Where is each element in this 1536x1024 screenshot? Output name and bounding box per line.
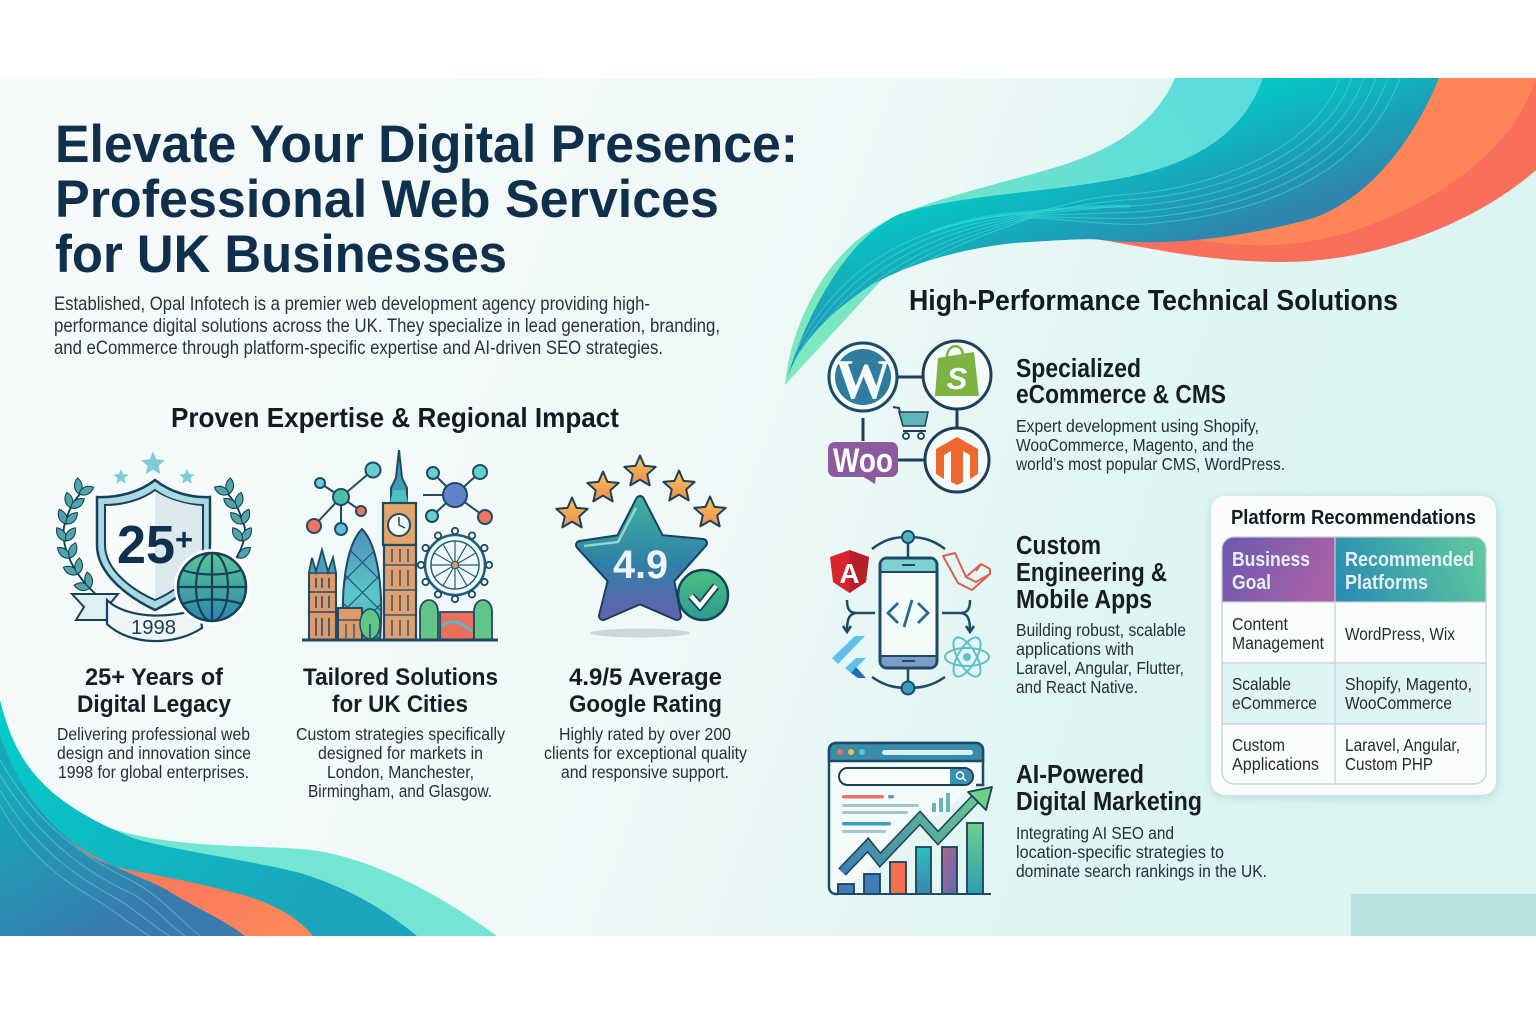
panel: platform recommendations: Laravel, Angular, [1345,735,1460,755]
block: AI marketing: AI-Powered [1016,761,1144,789]
icon: mobile apps [830,531,990,694]
block: custom engineering: Custom [1016,532,1101,560]
stat: google rating [544,664,747,782]
title: Professional Web Services [55,170,719,229]
icon: 25+ years shield [54,452,254,641]
icon: 25+ years shield: 1998 [131,617,176,639]
wave: top right [785,78,1536,385]
heading: technical solutions: High-Performance Technical Solutions [909,285,1398,317]
stat: google rating: 4.9/5 Average [569,664,722,691]
panel: platform recommendations: Shopify, Magento, [1345,674,1472,694]
block: custom engineering: Mobile Apps [1016,586,1152,614]
icon: UK cities skyline [302,450,498,655]
title: Elevate Your Digital Presence: [55,115,798,174]
stat: 25+ years: 25+ Years of [85,664,224,691]
block: ecommerce and CMS: Expert development using Shopify, [1016,416,1259,436]
icon: ecommerce platforms [828,341,991,492]
stat: tailored solutions: Birmingham, and Glasgow. [308,781,492,801]
stat: 25+ years: Digital Legacy [77,691,231,718]
title: for UK Businesses [55,225,507,284]
block: ecommerce and CMS: Specialized [1016,355,1141,383]
block: custom engineering [1016,532,1186,697]
block: custom engineering: Building robust, scalable [1016,620,1186,640]
intro paragraph: performance digital solutions across the UK. They specialize in lead generation, branding, [54,315,720,337]
stat: google rating: Google Rating [569,691,722,718]
stat: google rating: clients for exceptional quality [544,743,747,763]
block: custom engineering: and React Native. [1016,677,1138,697]
block: ecommerce and CMS: world’s most popular CMS, WordPress. [1015,454,1285,474]
icon: mobile apps: A [839,558,860,589]
stat: google rating: Highly rated by over 200 [559,724,731,744]
icon: ecommerce platforms: W [835,349,891,411]
panel: platform recommendations: Applications [1232,754,1319,774]
panel: platform recommendations: Platforms [1345,572,1428,594]
stat: tailored solutions: designed for markets in [318,743,483,763]
panel: platform recommendations: Platform Recommendations [1231,507,1476,529]
icon: 25+ years shield: 25 [117,515,175,575]
icon: rating stars: 4.9 [613,543,668,587]
panel: platform recommendations: Custom [1232,735,1285,755]
panel: platform recommendations: Management [1232,633,1324,653]
block: AI marketing: location-specific strategies to [1016,842,1224,862]
panel: platform recommendations: Goal [1232,572,1271,594]
block: custom engineering: Laravel, Angular, Flutter, [1016,658,1184,678]
block: custom engineering: applications with [1016,639,1134,659]
stat: 25+ years: 1998 for global enterprises. [58,762,249,782]
stat: google rating: and responsive support. [561,762,729,782]
icon: 25+ years shield: + [175,522,193,557]
panel: platform recommendations: Content [1232,614,1288,634]
icon: ecommerce platforms: Woo [833,442,893,480]
block: ecommerce and CMS: WooCommerce, Magento, and the [1016,435,1254,455]
intro paragraph [54,293,720,359]
stat: tailored solutions: for UK Cities [332,691,468,718]
panel: platform recommendations: WordPress, Wix [1345,624,1455,644]
panel: platform recommendations: Business [1232,549,1310,571]
stat: tailored solutions: Custom strategies specifically [296,724,505,744]
block: AI marketing: Integrating AI SEO and [1016,823,1174,843]
panel: platform recommendations: WooCommerce [1345,693,1452,713]
stat: 25+ years: design and innovation since [57,743,251,763]
block: custom engineering: Engineering & [1016,559,1167,587]
panel: platform recommendations [1211,496,1496,795]
icon: rating stars [556,456,728,638]
block: ecommerce and CMS [1015,355,1285,474]
textured patch bottom right [1351,894,1536,936]
panel: platform recommendations: Custom PHP [1345,754,1433,774]
block: AI marketing: dominate search rankings in the UK. [1016,861,1267,881]
stat: tailored solutions: London, Manchester, [327,762,474,782]
block: AI marketing [1016,761,1267,881]
icon: ecommerce platforms: S [947,361,968,396]
wave: bottom left [0,700,497,936]
stat: 25+ years [57,664,251,782]
panel: platform recommendations: Recommended [1345,549,1474,571]
panel: platform recommendations: Scalable [1232,674,1291,694]
intro paragraph: Established, Opal Infotech is a premier web development agency providing high- [54,293,650,315]
block: ecommerce and CMS: eCommerce & CMS [1016,381,1226,409]
stat: tailored solutions [296,664,505,801]
panel: platform recommendations: eCommerce [1232,693,1317,713]
block: AI marketing: Digital Marketing [1016,788,1202,816]
stat: 25+ years: Delivering professional web [57,724,250,744]
icon: search marketing [829,743,992,894]
intro paragraph: and eCommerce through platform-specific expertise and AI-driven SEO strategies. [54,337,663,359]
heading: proven expertise: Proven Expertise & Regional Impact [171,402,619,433]
title [55,115,798,284]
stat: tailored solutions: Tailored Solutions [303,664,498,691]
